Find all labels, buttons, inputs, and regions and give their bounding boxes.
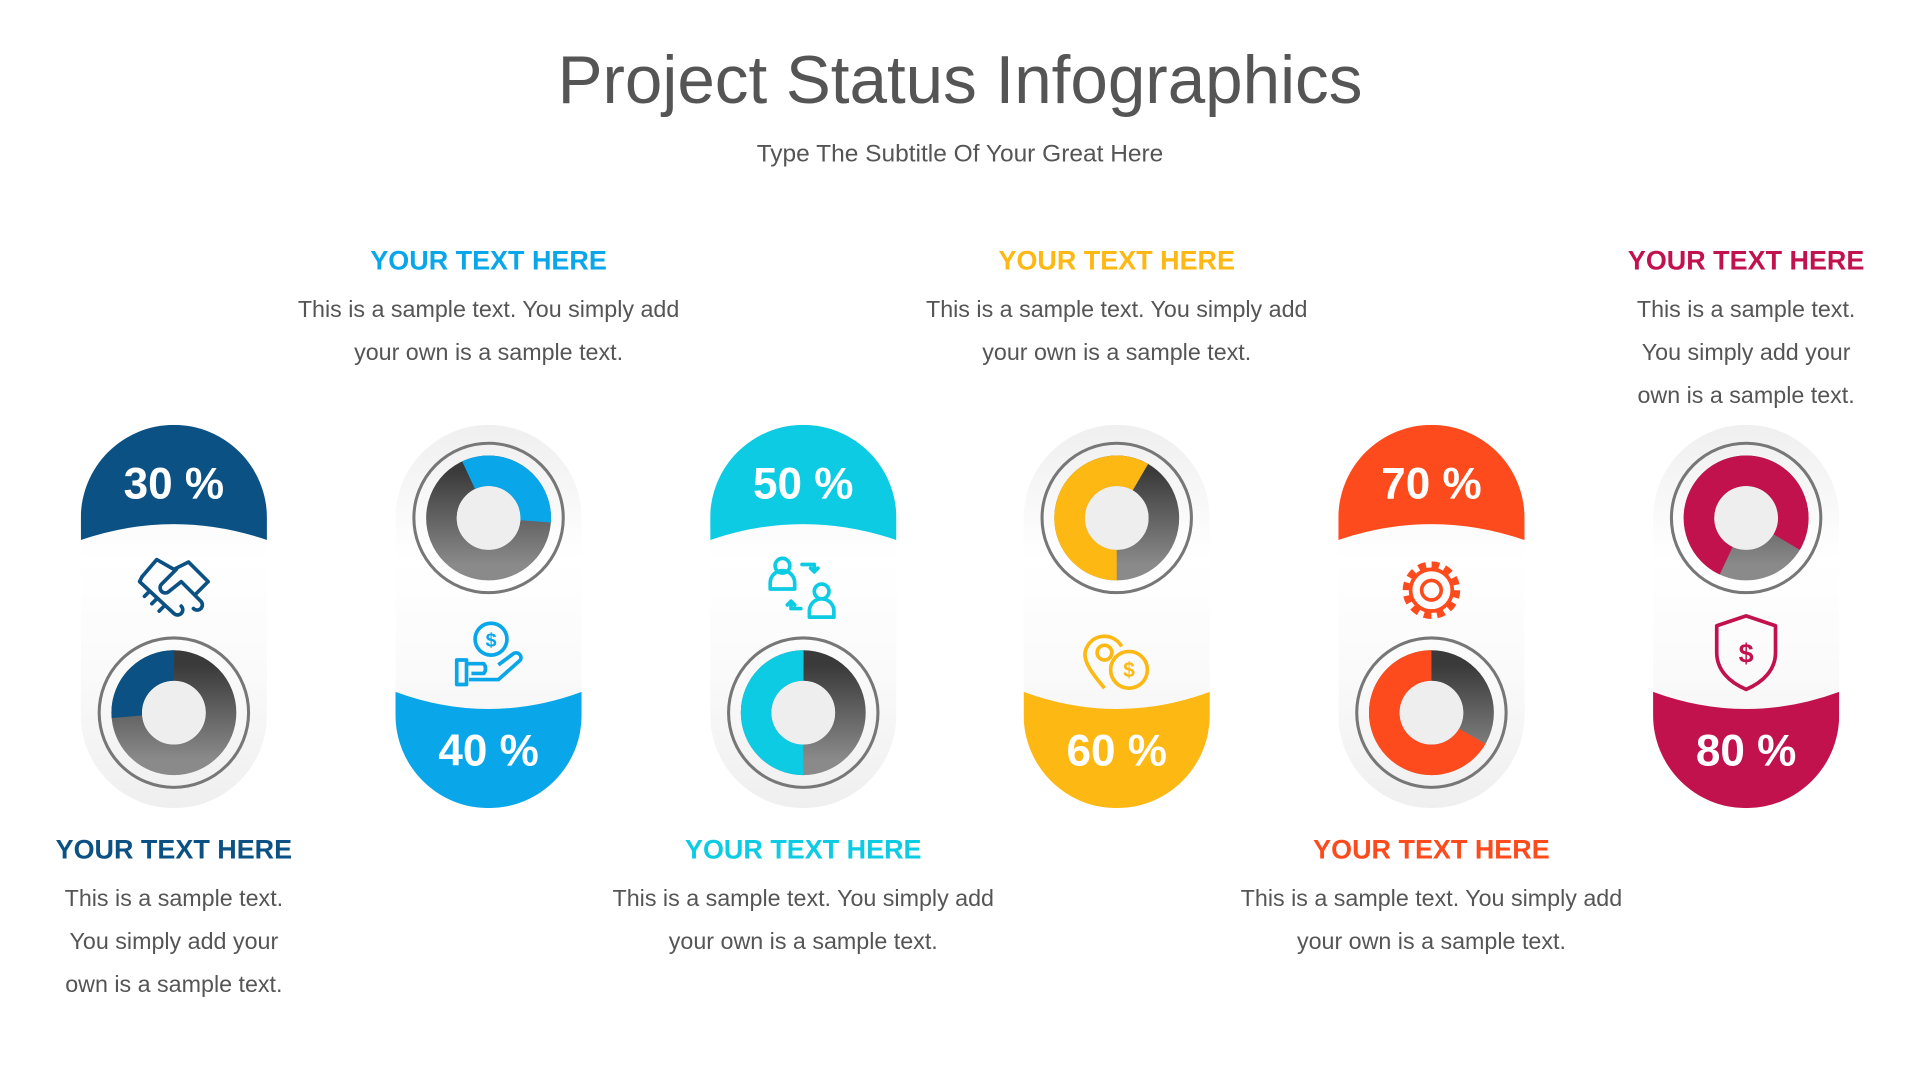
- text block: top 1: your own is a sample text.: [354, 340, 623, 366]
- text block: bottom 2: YOUR TEXT HERE: [685, 834, 922, 864]
- panel: 40%: $: [486, 630, 497, 652]
- text block: bottom 2: [613, 834, 994, 955]
- icon: shield dollar: [1717, 616, 1776, 689]
- text block: top 1: [298, 245, 679, 366]
- icon: location coin: [1085, 636, 1147, 688]
- panel: 50%: [710, 424, 896, 808]
- text block: top 2: YOUR TEXT HERE: [998, 245, 1235, 276]
- text block: bottom 1: This is a sample text.: [65, 887, 283, 912]
- text block: top 2: This is a sample text. You simply add: [926, 298, 1307, 323]
- panel: 60%: [1024, 425, 1210, 808]
- panel: 40%: [396, 425, 582, 808]
- panel: 60%: $: [1123, 659, 1135, 682]
- panel: 80%: [1653, 425, 1840, 808]
- text block: bottom 2: your own is a sample text.: [669, 929, 938, 955]
- text block: top 3: YOUR TEXT HERE: [1628, 245, 1864, 276]
- text block: top 3: This is a sample text.: [1637, 298, 1855, 323]
- panel: 50%: 50 %: [753, 459, 853, 508]
- text block: bottom 1: own is a sample text.: [65, 972, 282, 998]
- text block: top 2: [926, 245, 1307, 366]
- text block: bottom 3: your own is a sample text.: [1297, 929, 1566, 955]
- panel: 80%: 80 %: [1696, 726, 1796, 775]
- text block: top 1: This is a sample text. You simply add: [298, 298, 679, 323]
- text block: bottom 2: This is a sample text. You simply add: [613, 887, 994, 912]
- panel: 40%: 40 %: [438, 726, 539, 775]
- subtitle: Type The Subtitle Of Your Great Here: [757, 141, 1163, 168]
- text block: top 3: own is a sample text.: [1637, 383, 1855, 409]
- panel: 70%: 70 %: [1381, 459, 1482, 508]
- text block: bottom 1: You simply add your: [70, 929, 278, 955]
- text block: top 3: [1628, 245, 1864, 409]
- text block: top 2: your own is a sample text.: [982, 340, 1251, 366]
- text block: top 1: YOUR TEXT HERE: [370, 245, 607, 276]
- icon: gear: [1407, 566, 1456, 615]
- text block: bottom 3: This is a sample text. You simply add: [1241, 887, 1622, 912]
- text block: bottom 1: [56, 834, 292, 998]
- panel: 30%: [80, 424, 267, 808]
- icon: shield dollar: $: [1739, 638, 1754, 668]
- text block: bottom 3: YOUR TEXT HERE: [1313, 834, 1550, 864]
- panel: 60%: 60 %: [1067, 726, 1167, 775]
- icon: people exchange: [770, 558, 834, 617]
- text block: bottom 3: [1241, 834, 1622, 955]
- panel: 70%: [1338, 424, 1524, 808]
- text block: top 3: You simply add your: [1642, 340, 1850, 366]
- icon: hand with coin: [457, 623, 521, 684]
- title: Project Status Infographics: [558, 42, 1362, 118]
- text block: bottom 1: YOUR TEXT HERE: [56, 834, 292, 864]
- icon: handshake: [140, 560, 208, 615]
- panel: 30%: 30 %: [124, 459, 224, 508]
